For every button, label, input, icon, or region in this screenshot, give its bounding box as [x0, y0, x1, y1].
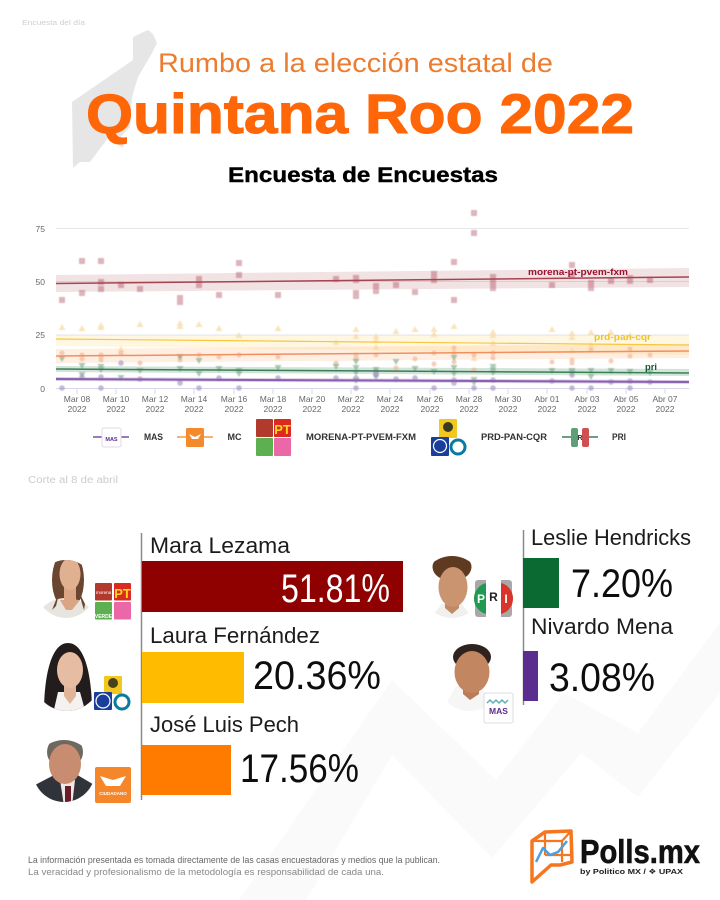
x axis labels: Mar 26: [417, 394, 443, 404]
name: Leslie Hendricks: [531, 525, 691, 550]
x axis labels: 2022: [578, 404, 597, 414]
series labels: pri: [645, 362, 657, 372]
x axis labels: 2022: [225, 404, 244, 414]
y axis labels: 0: [40, 384, 45, 394]
legend: PRD-PAN-CQR: [431, 419, 548, 456]
MORENA-PT-PVEM-FXM polls: [62, 213, 650, 302]
legend: MORENA-PT-PVEM-FXM: [256, 419, 416, 456]
bar: [142, 561, 403, 612]
logos: Morena PT PVEM FXM: morena: [96, 590, 112, 595]
bar: [523, 651, 538, 701]
title: [86, 48, 634, 145]
logo: Polls.mx: by Politico MX / ❖ UPAX: [580, 867, 683, 876]
legend: MC: MC: [228, 432, 242, 442]
logos: Morena PT PVEM FXM: VERDE: [95, 614, 113, 620]
logo: PRI: P: [477, 592, 485, 606]
x axis labels: Mar 16: [221, 394, 247, 404]
x axis labels: 2022: [107, 404, 126, 414]
x axis labels: 2022: [185, 404, 204, 414]
logo: MAS: [484, 693, 513, 723]
footer note: La veracidad y profesionalismo de la metodología es responsabilidad de cada una.: [28, 867, 384, 877]
x axis labels: 2022: [68, 404, 87, 414]
legend: MAS: MAS: [105, 437, 118, 443]
logos: Morena PT PVEM FXM: PT: [114, 586, 131, 601]
portrait: Nivardo Mena: [448, 644, 491, 711]
logo: Movimiento Ciudadano: CIUDADANO: [99, 791, 127, 796]
logo: Polls.mx: Polls.mx: [580, 833, 701, 870]
x axis labels: Mar 12: [142, 394, 168, 404]
legend: MORENA-PT-PVEM-FXM: PT: [274, 422, 291, 437]
bar: [142, 652, 244, 703]
x axis labels: Abr 07: [652, 394, 678, 404]
candidate: Laura Fernández: [44, 623, 381, 714]
logo: MAS: MAS: [489, 706, 508, 716]
PRI polls: [58, 354, 654, 386]
confidence bands: [56, 268, 689, 384]
legend: PRI: R: [577, 435, 583, 442]
value: 17.56%: [240, 747, 359, 791]
x axis labels: 2022: [499, 404, 518, 414]
candidate: Nivardo Mena: [440, 614, 674, 723]
x axis labels: 2022: [656, 404, 675, 414]
x axis labels: Mar 30: [495, 394, 521, 404]
x axis labels: 2022: [381, 404, 400, 414]
x axis labels: Mar 22: [338, 394, 364, 404]
map of Quintana Roo: [72, 30, 157, 168]
x axis labels: 2022: [421, 404, 440, 414]
x axis labels: 2022: [617, 404, 636, 414]
value: 51.81%: [281, 567, 390, 611]
line chart: poll of polls: [36, 213, 689, 414]
right axis line: [522, 530, 524, 705]
trend lines: [56, 277, 689, 382]
legend: MAS: [93, 428, 163, 447]
chart heading: Encuesta de Encuestas: [228, 164, 498, 187]
footer note: [28, 855, 440, 877]
name: José Luis Pech: [150, 712, 299, 737]
series labels: morena-pt-pvem-fxm: [528, 267, 628, 277]
x axis labels: 2022: [303, 404, 322, 414]
y axis labels: 50: [36, 277, 45, 287]
x axis labels: Abr 05: [613, 394, 639, 404]
icon: speech bubble chart: [532, 831, 572, 882]
legend: MC: [177, 428, 242, 447]
logo: Movimiento Ciudadano: [95, 767, 131, 803]
legend: MORENA-PT-PVEM-FXM: MORENA-PT-PVEM-FXM: [306, 432, 416, 442]
x axis labels: 2022: [264, 404, 283, 414]
x axis labels: Abr 03: [574, 394, 600, 404]
cutoff date: Corte al 8 de abril: [28, 475, 118, 486]
logo: Polls.mx: [532, 831, 701, 882]
x axis labels: [64, 394, 678, 414]
portrait: Leslie Hendricks: [432, 556, 472, 618]
title: Rumbo a la elección estatal de: [158, 48, 553, 78]
x axis labels: Mar 18: [260, 394, 286, 404]
name: Mara Lezama: [150, 533, 291, 558]
source label: Encuesta del día: [22, 18, 86, 27]
x axis labels: Mar 28: [456, 394, 482, 404]
portrait: Laura Fernández: [44, 643, 92, 714]
legend: [93, 419, 626, 456]
x axis labels: Mar 08: [64, 394, 90, 404]
value: 7.20%: [571, 562, 673, 606]
left axis line: [140, 533, 142, 800]
bar: [523, 558, 559, 608]
logo: PRI: I: [504, 592, 508, 606]
name: Nivardo Mena: [531, 614, 674, 639]
x axis labels: Mar 20: [299, 394, 325, 404]
x axis labels: 2022: [342, 404, 361, 414]
series labels: prd-pan-cqr: [594, 332, 652, 342]
x axis labels: 2022: [460, 404, 479, 414]
series labels: [528, 267, 657, 372]
y axis labels: 75: [36, 224, 45, 234]
x axis labels: Mar 24: [377, 394, 403, 404]
name: Laura Fernández: [150, 623, 320, 648]
legend: PRD-PAN-CQR: PRD-PAN-CQR: [481, 432, 548, 442]
MC polls: [62, 348, 650, 370]
portrait: José Luis Pech: [36, 740, 92, 802]
logo: PRI: [474, 580, 513, 617]
bar: [142, 745, 231, 795]
value: 20.36%: [253, 654, 381, 698]
x axis labels: Mar 14: [181, 394, 207, 404]
legend: MAS: MAS: [144, 432, 163, 442]
y axis labels: [36, 224, 45, 394]
y axis labels: 25: [36, 330, 45, 340]
MAS polls: [62, 363, 650, 388]
candidate: Leslie Hendricks: [428, 525, 691, 620]
title: Quintana Roo 2022: [86, 82, 634, 145]
logos: Morena PT PVEM FXM: [95, 583, 131, 620]
logos: PRD PAN CQR: [94, 676, 129, 710]
x axis labels: Mar 10: [103, 394, 129, 404]
legend: PRI: [562, 428, 626, 447]
logo: PRI: R: [489, 590, 498, 604]
footer note: La información presentada es tomada directamente de las casas encuestadoras y medios que la publican.: [28, 855, 440, 865]
x axis labels: 2022: [146, 404, 165, 414]
PRD-PAN-CQR polls: [58, 320, 634, 361]
candidate: José Luis Pech: [33, 712, 359, 806]
x axis labels: Abr 01: [534, 394, 560, 404]
candidate: Mara Lezama: [44, 538, 403, 620]
value: 3.08%: [549, 656, 655, 700]
portrait: Mara Lezama: [44, 560, 88, 618]
x axis labels: 2022: [538, 404, 557, 414]
legend: PRI: PRI: [612, 432, 626, 442]
